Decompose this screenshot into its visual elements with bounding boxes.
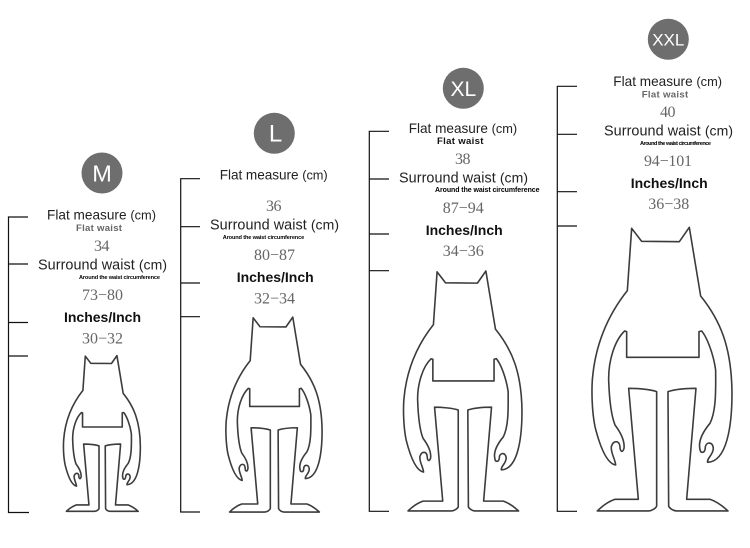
value: inches 36-38: 36−38 — [648, 196, 689, 213]
label: flat measure: Flat measure (cm) — [220, 168, 328, 182]
column: size XXL — [557, 19, 733, 511]
value: flat 34: 34 — [94, 238, 110, 255]
label: surround waist: Surround waist (cm) — [38, 256, 167, 274]
value: inches 32-34: 32−34 — [254, 290, 295, 308]
badge: L: L — [269, 121, 282, 148]
label: flat measure: Flat measure (cm) — [47, 208, 156, 222]
label: around the waist: Around the waist circumference — [435, 187, 540, 194]
value: inches 30-32: 30−32 — [82, 330, 123, 348]
column: size L — [181, 113, 339, 512]
badge: L — [254, 113, 295, 154]
label: inches: Inches/Inch — [631, 175, 708, 191]
value: surround 80-87: 80−87 — [254, 247, 295, 264]
figure L — [226, 317, 322, 512]
value: flat 36: 36 — [266, 198, 282, 215]
label: surround waist: Surround waist (cm) — [399, 170, 528, 186]
column: size XL — [369, 68, 540, 511]
label: inches: Inches/Inch — [64, 309, 141, 325]
label: flat waist: Flat waist — [437, 136, 484, 147]
badge: M — [82, 152, 122, 194]
label: inches: Inches/Inch — [237, 269, 314, 285]
badge: XL — [443, 68, 484, 109]
column: size M — [8, 152, 167, 512]
label: surround waist: Surround waist (cm) — [604, 122, 733, 140]
value: flat 40: 40 — [660, 104, 676, 121]
label: flat measure: Flat measure (cm) — [613, 74, 722, 89]
value: flat 38: 38 — [455, 151, 470, 168]
label: flat waist: Flat waist — [76, 223, 123, 234]
value: inches 34-36: 34−36 — [443, 243, 484, 260]
figure XL — [404, 271, 522, 511]
height bracket M — [8, 217, 29, 512]
height bracket XL — [369, 131, 389, 511]
label: around the waist: Around the waist circumference — [640, 141, 711, 147]
label: flat measure: Flat measure (cm) — [409, 121, 517, 136]
badge: XXL — [648, 19, 689, 60]
label: around the waist: Around the waist circumference — [79, 275, 160, 281]
label: surround waist: Surround waist (cm) — [210, 216, 339, 234]
figure M — [63, 356, 140, 511]
value: surround 73-80: 73−80 — [82, 287, 123, 304]
value: surround 94-101: 94−101 — [644, 153, 692, 170]
value: surround 87-94: 87−94 — [443, 200, 484, 217]
label: flat waist: Flat waist — [642, 90, 689, 100]
height bracket L — [181, 179, 200, 512]
label: around the waist: Around the waist circumference — [223, 235, 304, 241]
badge: XXL: XXL — [652, 30, 684, 49]
label: inches: Inches/Inch — [426, 222, 503, 238]
height bracket XXL — [557, 86, 577, 511]
badge: XL: XL — [450, 78, 476, 101]
figure XXL — [592, 227, 732, 511]
badge: M: M — [92, 160, 112, 186]
